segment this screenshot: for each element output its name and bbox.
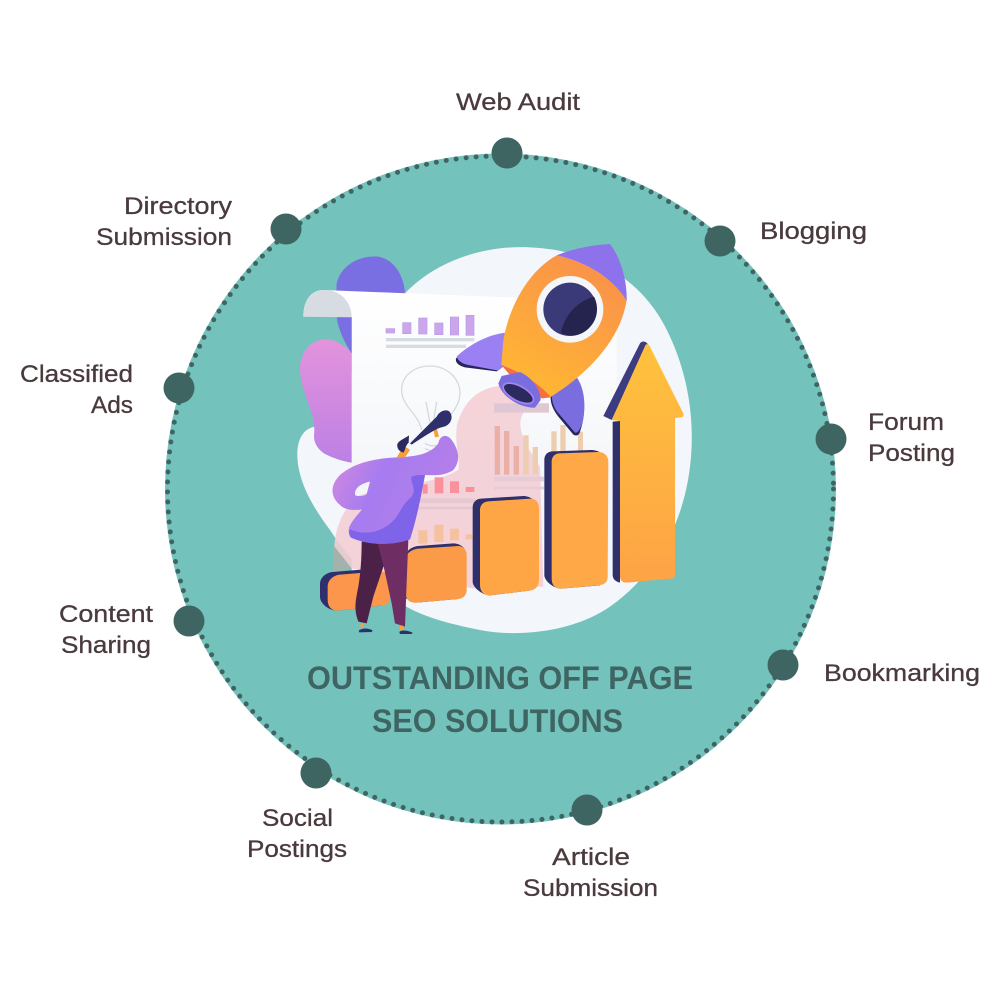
heading: OUTSTANDING OFF PAGE: [307, 660, 693, 696]
light bulb outline: [402, 366, 460, 453]
mini bar chart top: [386, 315, 474, 335]
pink leaf: [300, 339, 352, 463]
white blob background: [297, 247, 692, 633]
sweater: [332, 436, 458, 544]
node: Classified Ads: Ads: [91, 392, 133, 419]
node: Article Submission: [523, 794, 658, 902]
neck: [397, 447, 410, 457]
teal circle with dotted ring: [165, 154, 836, 824]
node: Article Submission: Article: [552, 844, 630, 871]
bar 5: arrow: [603, 342, 683, 583]
node: Classified Ads: Classified: [20, 361, 133, 388]
rocket: [456, 244, 627, 436]
bar 3: [473, 496, 539, 595]
node: Blogging: Blogging: [760, 218, 867, 245]
node: Content Sharing: [59, 601, 204, 659]
head and hair: [397, 435, 409, 453]
nozzle: [498, 372, 541, 408]
shoes: [359, 628, 373, 632]
legs: [355, 542, 387, 623]
node: Content Sharing: Sharing: [61, 632, 151, 659]
heading: [307, 660, 693, 739]
central illustration: [297, 244, 692, 634]
left fin: [456, 333, 507, 371]
faded teal triangle: [333, 545, 352, 572]
node: Forum Posting: Posting: [868, 440, 955, 467]
porthole: [537, 276, 603, 343]
pink background shape: [334, 386, 543, 588]
node: Article Submission: Submission: [523, 875, 658, 902]
node: Directory Submission: [96, 193, 302, 251]
lower fin: [551, 377, 584, 436]
node: Social Postings: Social: [262, 805, 333, 832]
node: Blogging: [704, 218, 867, 256]
node: Bookmarking: [768, 650, 980, 687]
node: Bookmarking: Bookmarking: [824, 660, 980, 687]
faded orange chart: [418, 525, 472, 544]
node: Content Sharing: Content: [59, 601, 153, 628]
red bar chart: [423, 477, 474, 494]
bar 4: [544, 450, 608, 589]
hand: [433, 425, 439, 437]
purple leaf lower stem: [337, 317, 352, 353]
node: Web Audit: [456, 89, 580, 168]
engine ring: [501, 365, 551, 398]
purple leaf: [336, 256, 405, 353]
faded bar chart right: [494, 403, 583, 489]
telescope: [410, 410, 452, 445]
heading: SEO SOLUTIONS: [372, 703, 623, 739]
node: Directory Submission: Submission: [96, 224, 232, 251]
node: Web Audit: Web Audit: [456, 89, 580, 116]
bar 1: [320, 569, 390, 611]
node: Social Postings: [247, 758, 347, 863]
sweater shadow: [349, 475, 425, 544]
node: Forum Posting: Forum: [868, 409, 944, 436]
node: Directory Submission: Directory: [124, 193, 232, 220]
node: Forum Posting: [816, 409, 955, 467]
document sheet: [303, 290, 617, 575]
rocket body: [501, 255, 627, 397]
bar 2: [406, 543, 467, 603]
nose cone: [557, 244, 627, 301]
person with telescope: [332, 410, 458, 634]
text lines on document: [386, 338, 474, 348]
node: Classified Ads: [20, 361, 194, 419]
node: Social Postings: Postings: [247, 836, 347, 863]
